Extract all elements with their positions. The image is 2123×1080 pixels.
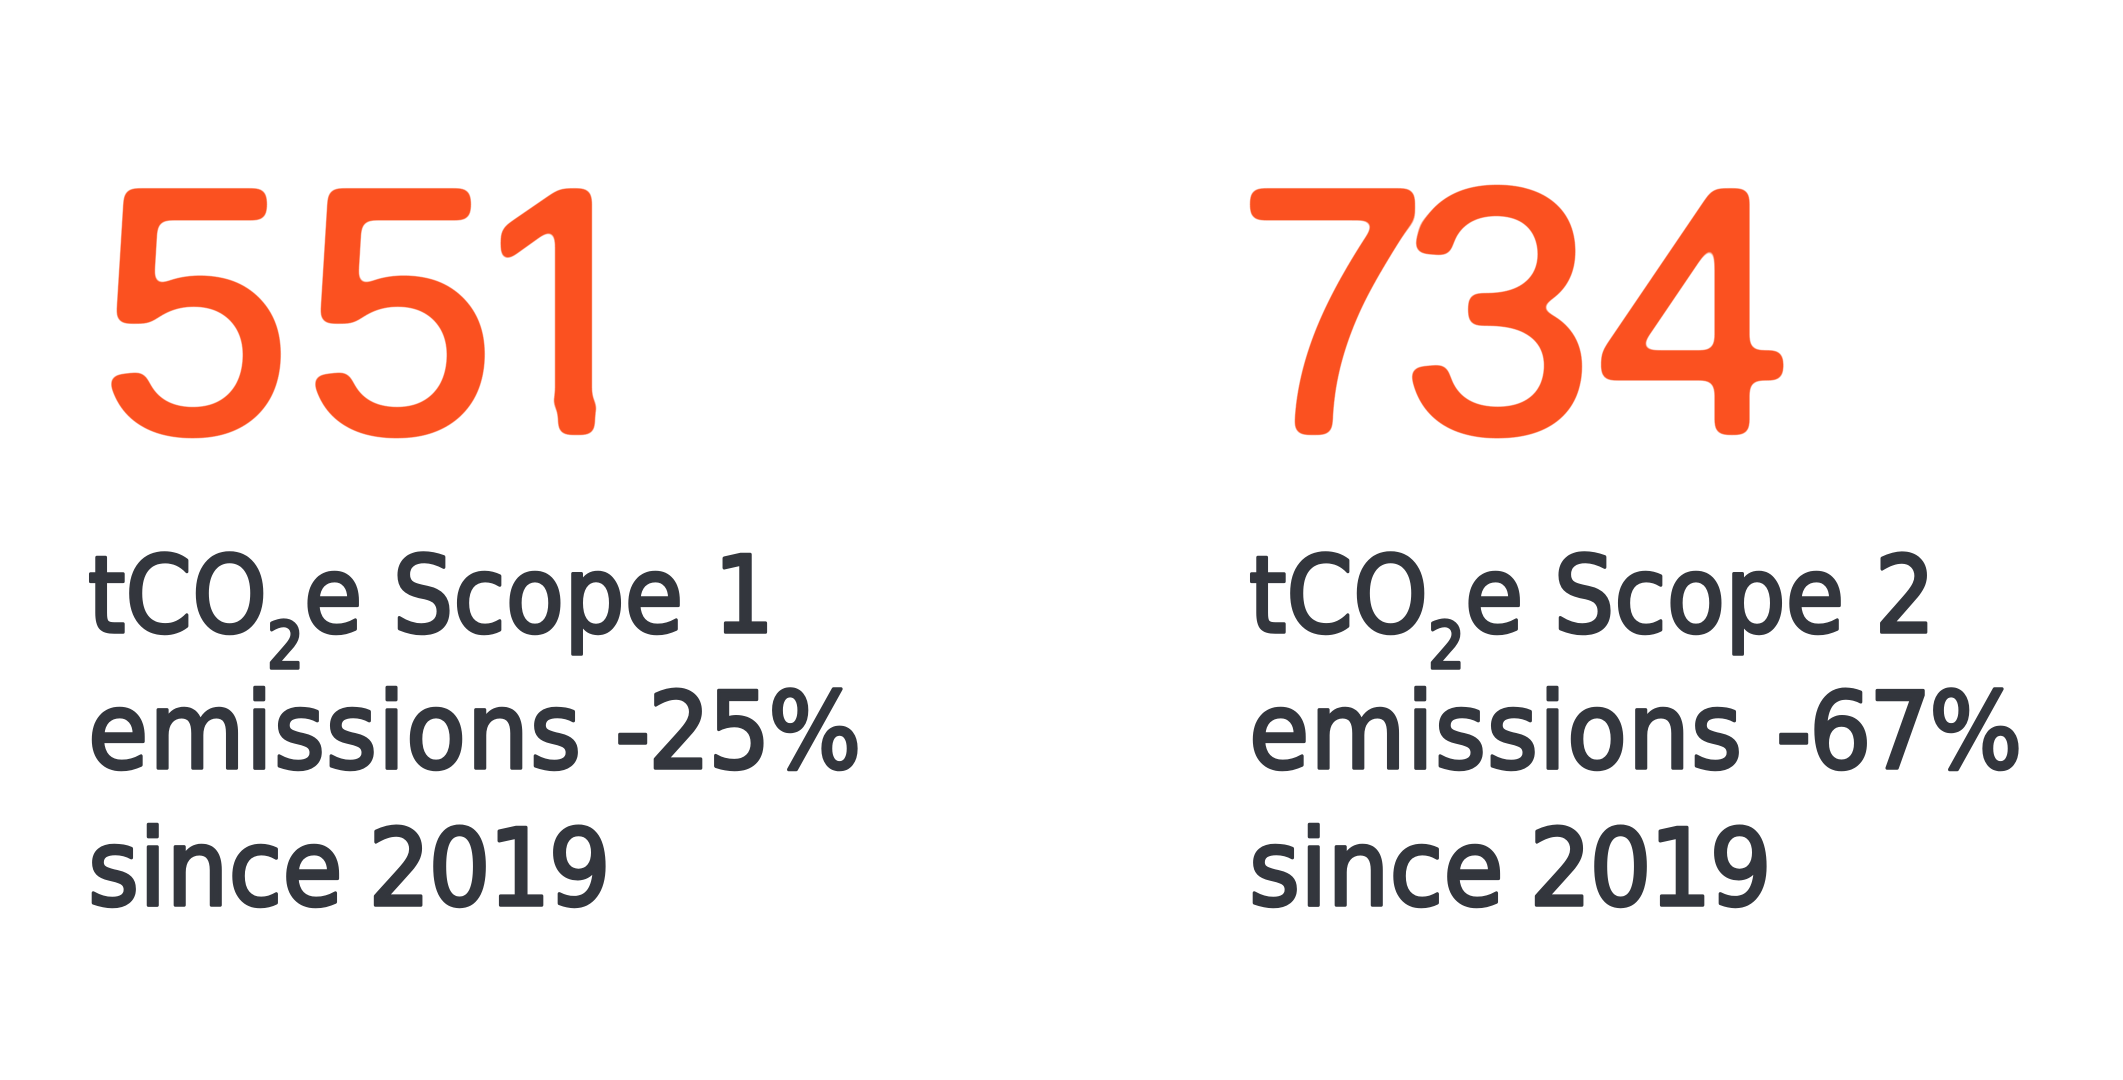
text block: Scope 1 description: tCO [88, 533, 267, 657]
text block: Scope 2 description: emissions -67% [1249, 670, 2020, 794]
text block: Scope 1 description: e Scope 1 [304, 533, 774, 657]
stat number: 551: 55 [98, 116, 497, 507]
stat number: 734: 734 [1235, 116, 1791, 507]
text block: Scope 1 description: emissions -25% [88, 670, 859, 794]
panel: Scope 1 [89, 188, 858, 908]
text block: Scope 2 description: 2 [1428, 609, 1465, 684]
text block: Scope 1 description: 2 [267, 609, 304, 684]
text block: Scope 1 description: since 2019 [88, 807, 609, 931]
stat number: 551 [111, 188, 596, 438]
text block: Scope 2 description: e Scope 2 [1465, 533, 1935, 657]
text block: Scope 2 description: tCO [1249, 533, 1428, 657]
text block: Scope 2 description: since 2019 [1249, 807, 1770, 931]
text block: Scope 2 description [1249, 533, 2020, 931]
stat number: 551: 1 [470, 116, 665, 507]
text block: Scope 1 description [88, 533, 859, 931]
panel: Scope 2 [1235, 116, 2020, 931]
